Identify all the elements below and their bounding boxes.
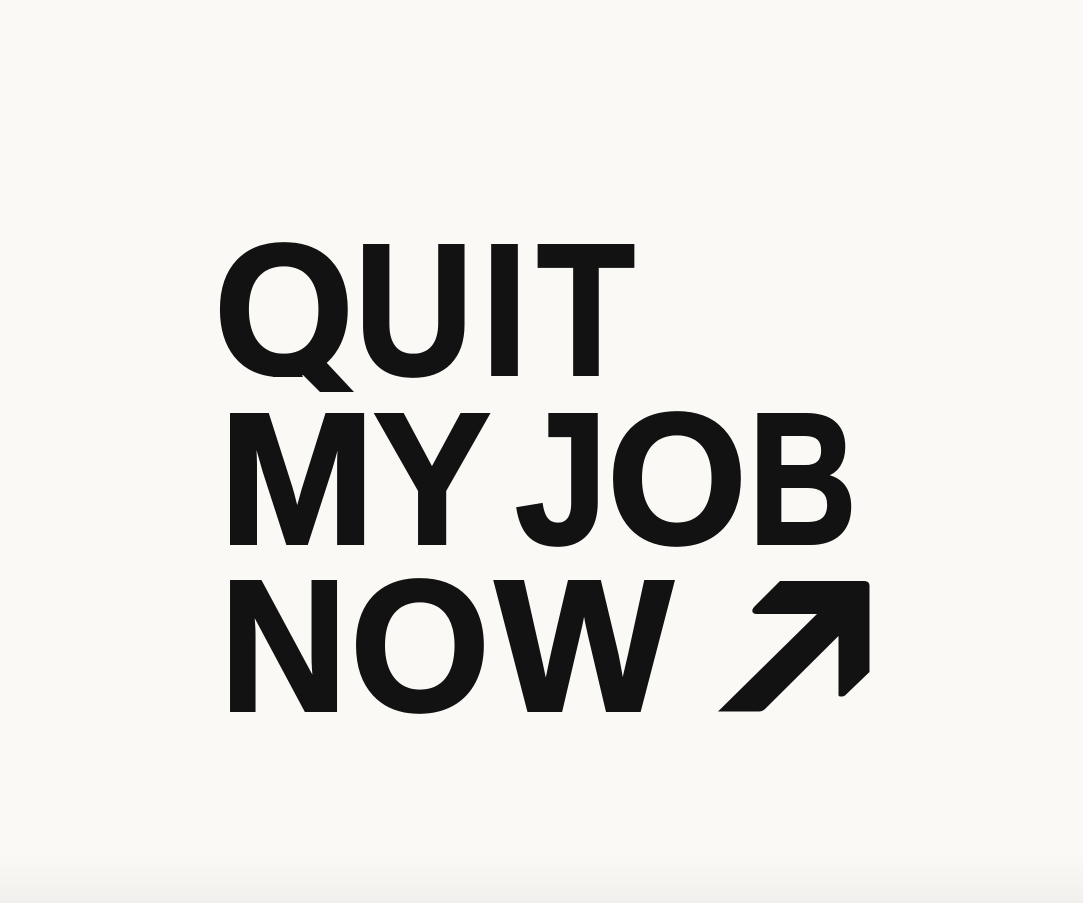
title line: QUIT <box>220 242 634 392</box>
icon: north-east arrow <box>718 581 870 712</box>
title line: QUIT: T <box>537 204 635 414</box>
title line: MY JOB: O <box>607 374 747 583</box>
title: QUIT MY JOB NOW <box>220 242 852 714</box>
title line: MY JOB: B <box>748 373 857 583</box>
title line: MY JOB <box>219 373 857 584</box>
title line: QUIT: U <box>354 205 473 415</box>
title line: QUIT: Q <box>214 205 354 414</box>
title line: NOW: N <box>220 541 348 751</box>
title line: MY JOB: J <box>515 373 608 584</box>
title line: NOW <box>220 541 674 751</box>
title line: NOW: O <box>350 541 490 750</box>
title line: NOW: W <box>495 541 674 750</box>
title line: MY JOB: M <box>219 374 375 584</box>
title line: MY JOB: Y <box>373 374 491 584</box>
title line: QUIT: I <box>481 204 528 415</box>
